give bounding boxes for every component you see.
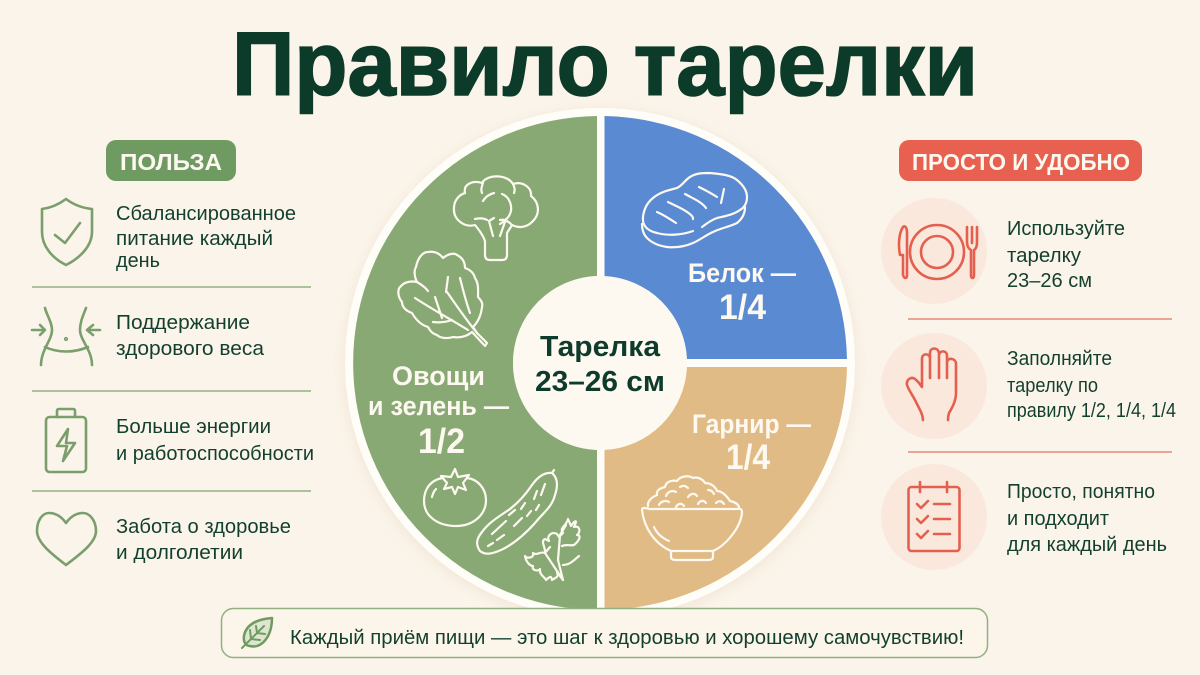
text: balanced nutrition: день (116, 249, 160, 272)
panel: plate chart (345, 108, 855, 621)
text: health and longevity: Забота о здоровье (116, 515, 291, 538)
text: use a plate: 23–26 см (1007, 269, 1092, 292)
label: protein: Белок — (688, 258, 796, 288)
plate centre (513, 276, 687, 450)
plate centre: 23–26 см (535, 366, 665, 398)
text: simple and clear: и подходит (1007, 507, 1110, 530)
label: vegetables: и зелень — (368, 391, 509, 421)
icon: broccoli (454, 176, 538, 260)
text: simple and clear: для каждый день (1007, 533, 1167, 556)
text: balanced nutrition (116, 202, 296, 272)
icon: parsley (525, 519, 580, 580)
icon: hand (881, 333, 987, 439)
label: side dish: Гарнир — (692, 409, 811, 439)
badge: benefits (106, 140, 236, 181)
icon: checklist (881, 464, 987, 570)
label: side dish (694, 414, 812, 470)
plate centre: Тарелка (540, 331, 661, 363)
label: protein (690, 264, 796, 320)
text: fill the plate: правилу 1/2, 1/4, 1/4 (1007, 399, 1176, 422)
icon: battery (46, 409, 86, 472)
label: vegetables: 1/2 (418, 422, 465, 461)
text: energy: Больше энергии (116, 415, 271, 438)
label: vegetables: Овощи (392, 361, 485, 391)
text: use a plate (1007, 217, 1125, 292)
badge: benefits: ПОЛЬЗА (120, 149, 222, 175)
callout: bottom banner: Каждый приём пищи — это шаг к здоровью и хорошему самочувствию! (290, 627, 964, 649)
icon: shield (42, 199, 92, 265)
text: fill the plate: тарелку по (1007, 374, 1098, 397)
slice: protein (604, 116, 847, 359)
text: energy: и работоспособности (116, 442, 314, 465)
text: healthy weight: здорового веса (116, 337, 265, 360)
text: use a plate: Используйте (1007, 217, 1125, 240)
icon: leafy greens (398, 252, 487, 346)
badge: simple and convenient: ПРОСТО И УДОБНО (912, 149, 1130, 175)
text: energy (116, 415, 314, 465)
label: vegetables (370, 366, 509, 454)
icon: leaf (242, 618, 272, 648)
slice: side dish (604, 367, 847, 610)
text: use a plate: тарелку (1007, 244, 1082, 267)
text: healthy weight (116, 311, 265, 360)
icon: plate and cutlery (881, 198, 987, 304)
badge: simple and convenient (899, 140, 1142, 181)
text: simple and clear (1007, 480, 1167, 556)
text: healthy weight: Поддержание (116, 311, 250, 334)
text: health and longevity: и долголетии (116, 541, 243, 564)
text: balanced nutrition: питание каждый (116, 227, 273, 250)
text: balanced nutrition: Сбалансированное (116, 202, 296, 225)
slice: vegetables and greens (353, 116, 597, 610)
icon: waist (32, 308, 100, 365)
icon: heart (37, 513, 96, 565)
icon: bowl of grains (642, 476, 742, 560)
icon: tomato (424, 469, 486, 526)
callout: bottom banner (222, 608, 988, 658)
text: fill the plate (1007, 347, 1176, 422)
text: fill the plate: Заполняйте (1007, 347, 1112, 370)
label: protein: 1/4 (719, 288, 767, 327)
icon: cucumber (477, 470, 557, 554)
title: Правило тарелки (232, 15, 978, 115)
icon: steak (642, 173, 747, 247)
text: health and longevity (116, 515, 291, 564)
label: side dish: 1/4 (726, 438, 770, 477)
text: simple and clear: Просто, понятно (1007, 480, 1155, 503)
